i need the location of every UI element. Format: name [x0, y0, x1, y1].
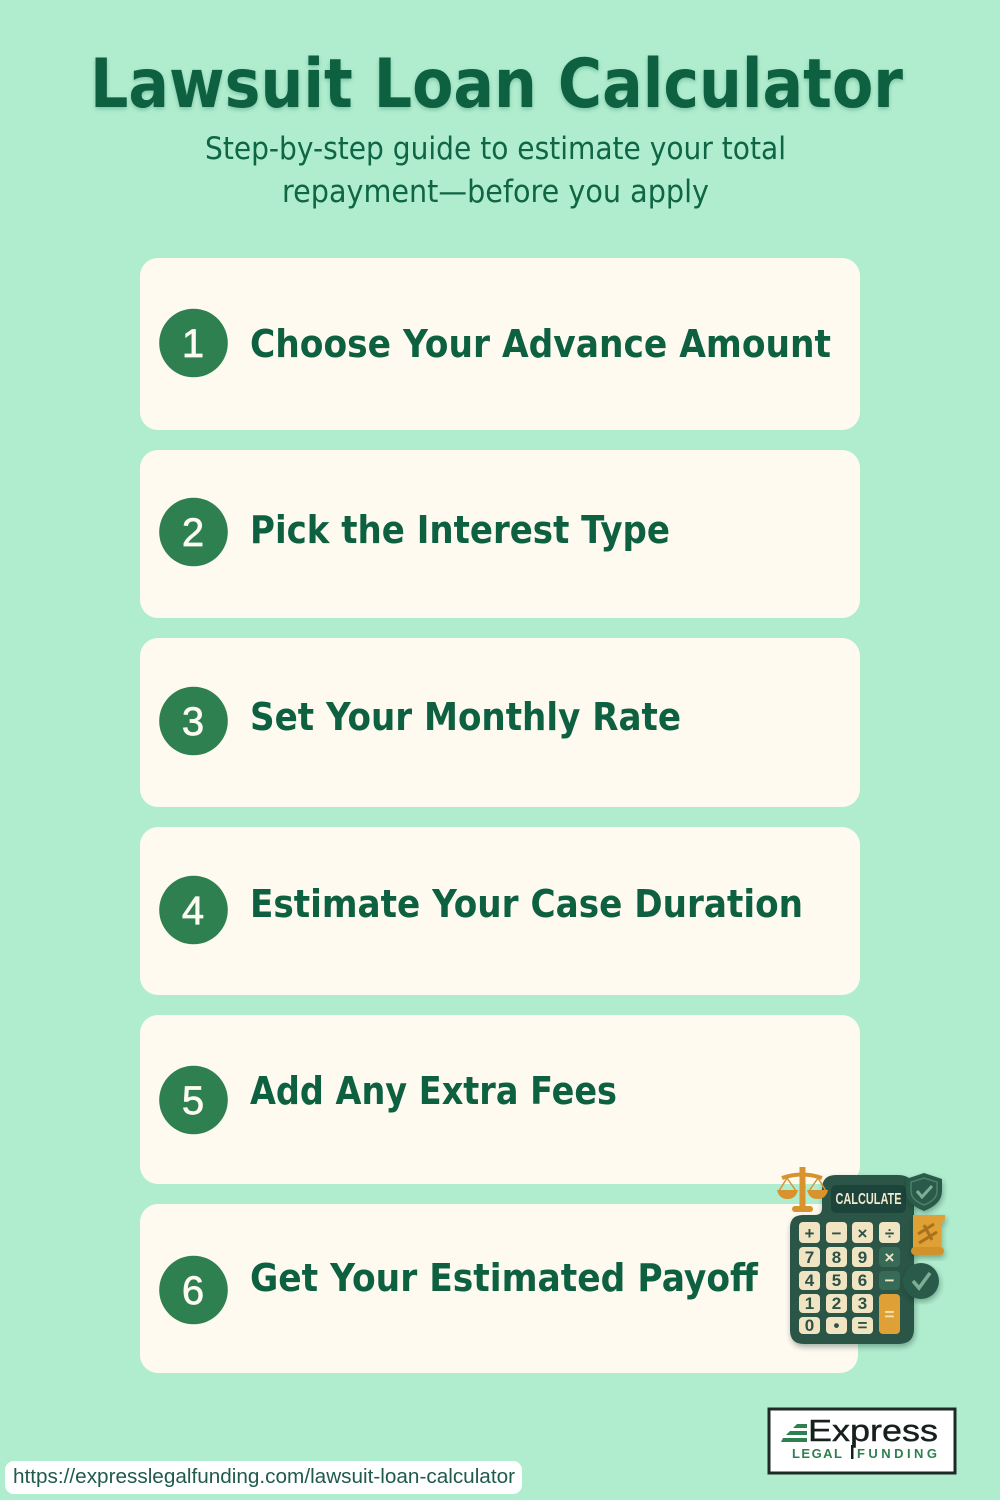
icon: scales of justice	[777, 1167, 828, 1212]
panel: step 5	[140, 1015, 860, 1184]
logo tagline	[792, 1446, 937, 1461]
logo tagline: FUNDING	[857, 1446, 937, 1461]
calculator keypad: 9	[858, 1248, 867, 1267]
panel: step 2	[140, 450, 860, 618]
step 6 number badge	[159, 1256, 228, 1324]
source URL pill	[5, 1461, 522, 1494]
calculator keypad: 5	[832, 1271, 841, 1290]
calculator keypad: ÷	[885, 1224, 894, 1243]
calculator keypad: 4	[805, 1271, 815, 1290]
step 3 label: Set Your Monthly Rate	[250, 695, 681, 739]
calculator keypad: −	[885, 1271, 895, 1290]
step 1 number badge	[159, 309, 228, 377]
step 1 number badge: 1	[182, 322, 204, 366]
logo stripes	[781, 1424, 807, 1442]
step 4 number badge	[159, 876, 228, 944]
subtitle: Step-by-step guide to estimate your total	[205, 131, 786, 167]
calculator keypad: •	[834, 1316, 840, 1335]
source URL pill: https://expresslegalfunding.com/lawsuit-loan-calculator	[13, 1466, 515, 1488]
calculator keypad: =	[858, 1316, 868, 1335]
step 2 number badge: 2	[182, 511, 204, 555]
step 5 number badge: 5	[182, 1079, 204, 1123]
panel: step 1	[140, 258, 860, 430]
step 4 number badge: 4	[182, 889, 204, 933]
icon: scroll	[911, 1215, 945, 1255]
logo wordmark	[808, 1413, 938, 1459]
calculator keypad	[799, 1222, 900, 1335]
calculator keypad: 1	[805, 1294, 814, 1313]
calculator display: CALCULATE	[836, 1191, 902, 1208]
step 6 label: Get Your Estimated Payoff	[250, 1256, 759, 1300]
calculator keypad: 6	[858, 1271, 867, 1290]
calculator body	[790, 1175, 914, 1344]
step 5 number badge	[159, 1066, 228, 1134]
calculator keypad: 7	[805, 1248, 814, 1267]
step 3 number badge: 3	[182, 700, 204, 744]
panel: step 3	[140, 638, 860, 807]
logo tagline: LEGAL	[792, 1446, 842, 1461]
icon: round check badge	[903, 1263, 939, 1299]
logo: Express Legal Funding	[769, 1409, 955, 1473]
calculator keypad: ×	[885, 1248, 895, 1267]
step 3 number badge	[159, 687, 228, 755]
logo wordmark: Express	[808, 1413, 938, 1448]
panel: step 6	[140, 1204, 858, 1373]
icon: calculator with scales, shield and scroll	[777, 1167, 945, 1344]
title: Lawsuit Loan Calculator	[90, 45, 903, 124]
calculator keypad: =	[885, 1305, 895, 1324]
step 1 label: Choose Your Advance Amount	[250, 322, 831, 366]
subtitle: repayment—before you apply	[282, 174, 709, 210]
calculator display	[831, 1185, 906, 1213]
step 2 label: Pick the Interest Type	[250, 508, 670, 552]
panel: step 4	[140, 827, 860, 995]
step 4 label: Estimate Your Case Duration	[250, 882, 803, 926]
calculator keypad: 8	[832, 1248, 841, 1267]
calculator keypad: ×	[858, 1224, 868, 1243]
calculator keypad: +	[805, 1224, 815, 1243]
calculator keypad: −	[832, 1224, 842, 1243]
step 2 number badge	[159, 498, 228, 566]
icon: shield with check	[906, 1173, 942, 1211]
subtitle	[205, 131, 786, 210]
calculator keypad: 2	[832, 1294, 841, 1313]
step 6 number badge: 6	[182, 1269, 204, 1313]
calculator keypad: 0	[805, 1316, 814, 1335]
step 5 label: Add Any Extra Fees	[250, 1069, 617, 1113]
calculator keypad: 3	[858, 1294, 867, 1313]
